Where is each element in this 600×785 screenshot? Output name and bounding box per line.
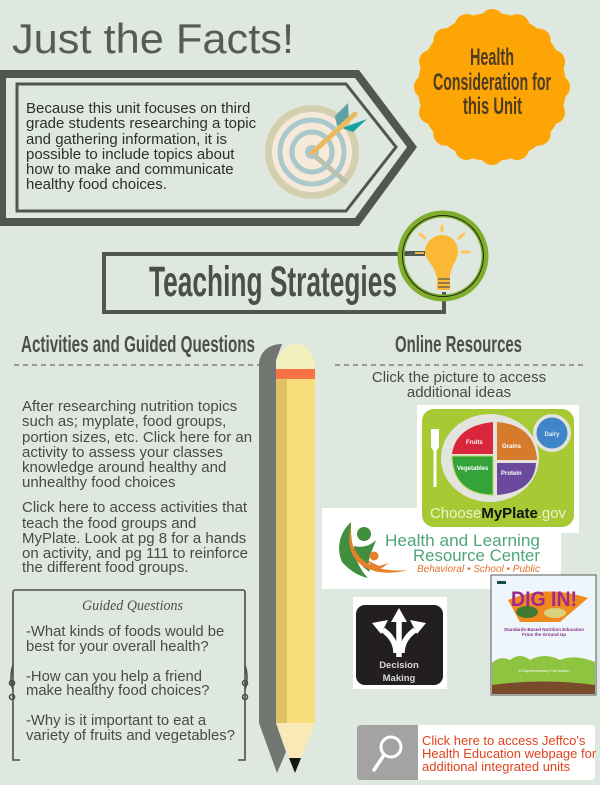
badge: health consideration <box>418 13 566 161</box>
text: activity paragraphs: Click here to access activities that <box>22 499 248 516</box>
image: decision making: Decision <box>379 660 419 671</box>
dairy <box>533 414 571 452</box>
text: activity paragraphs: MyPlate. Look at pg 8 for a hands <box>22 530 246 547</box>
heading box: teaching strategies <box>104 254 444 312</box>
link text: Click here to access Jeffco's <box>422 733 586 748</box>
logo wordmark: ChooseMyPlate.gov <box>430 505 566 522</box>
text: activity paragraphs: the different food groups. <box>22 559 189 576</box>
text: activity paragraphs <box>22 398 252 576</box>
icon: target with arrow <box>265 103 367 199</box>
text: activity paragraphs: teach the food groups and <box>22 515 196 532</box>
text: activity paragraphs: such as; myplate, food groups, <box>22 413 226 430</box>
image: health and learning resource center logo: Behavioral • School • Public <box>417 564 540 575</box>
link callout: jeffco health education <box>357 725 597 780</box>
questions: -How can you help a friend <box>26 669 202 685</box>
pencil lead <box>289 758 301 773</box>
intro text: healthy food choices. <box>26 176 167 193</box>
icon: magnifier <box>374 737 401 770</box>
link text: additional integrated units <box>422 759 571 774</box>
image: dig in cover: Standards-Based Nutrition Education <box>504 627 584 632</box>
divider left <box>14 364 260 366</box>
pencil eraser <box>276 344 315 369</box>
text: activity paragraphs: After researching nutrition topics <box>22 398 237 415</box>
inner arrow outline <box>17 84 396 211</box>
intro text: grade students researching a topic <box>26 115 257 132</box>
text: activity paragraphs: unhealthy food choices <box>22 474 175 491</box>
image: choose my plate: Fruits <box>466 440 483 446</box>
questions: -What kinds of foods would be <box>26 624 224 640</box>
image: choose my plate: Grains <box>502 444 522 450</box>
fork <box>431 429 439 487</box>
image: choose my plate: Protein <box>501 471 522 477</box>
pencil tip <box>276 723 315 773</box>
pencil ferrule <box>276 369 315 379</box>
intro text: how to make and communicate <box>26 161 234 178</box>
intro text: and gathering information, it is <box>26 131 227 148</box>
guided questions heading: Guided Questions <box>82 598 183 614</box>
pencil shadow <box>259 344 286 773</box>
image: dig in cover: From the Ground Up <box>522 632 566 637</box>
link text: Health Education webpage for <box>422 746 597 761</box>
image: dig in cover: DIG IN! <box>511 588 577 611</box>
image: dig in cover <box>491 575 596 695</box>
image: health and learning resource center logo: Resource Center <box>413 546 540 565</box>
image: decision making <box>353 597 447 689</box>
text: activity paragraphs: knowledge around healthy and <box>22 459 226 476</box>
badge: health consideration: this Unit <box>463 93 522 120</box>
image: choose my plate: Vegetables <box>457 466 489 472</box>
intro text: Because this unit focuses on third <box>26 100 250 117</box>
questions: -Why is it important to eat a <box>26 713 207 729</box>
text: activity paragraphs: on activity, and pg 111 to reinforce <box>22 545 248 562</box>
image: dig in cover: A Supplementary Curriculum <box>519 668 570 673</box>
text: click the picture: Click the picture to access <box>372 369 546 386</box>
title: Just the Facts! <box>12 15 294 62</box>
image: choose my plate: Dairy <box>544 432 560 438</box>
image: decision making: Making <box>383 673 416 684</box>
image: choose my plate <box>417 405 579 533</box>
scroll frame <box>11 590 247 760</box>
text: activity paragraphs: portion sizes, etc. Click here for an <box>22 429 252 446</box>
image: health and learning resource center logo: Health and Learning <box>385 531 540 550</box>
questions: variety of fruits and vegetables? <box>26 728 235 744</box>
badge: health consideration: Health <box>470 44 514 71</box>
heading: online resources: Online Resources <box>395 331 522 357</box>
heading: activities and guided questions: Activities and Guided Questions <box>21 331 255 357</box>
icon: light bulb in green ring <box>401 214 485 298</box>
pencil <box>259 344 315 773</box>
image: health and learning resource center logo <box>322 508 561 589</box>
questions: best for your overall health? <box>26 639 209 655</box>
panel: intro arrow banner <box>0 74 412 222</box>
heading box: teaching strategies: Teaching Strategies <box>149 258 397 306</box>
questions: make healthy food choices? <box>26 683 209 699</box>
text: click the picture: additional ideas <box>407 384 511 401</box>
divider right <box>335 364 585 366</box>
plate <box>441 414 539 502</box>
panel: guided questions <box>10 590 248 760</box>
pencil body <box>276 379 315 723</box>
intro text: possible to include topics about <box>26 146 235 163</box>
text: activity paragraphs: activity to assess your classes <box>22 444 223 461</box>
outer arrow outline <box>0 74 412 222</box>
